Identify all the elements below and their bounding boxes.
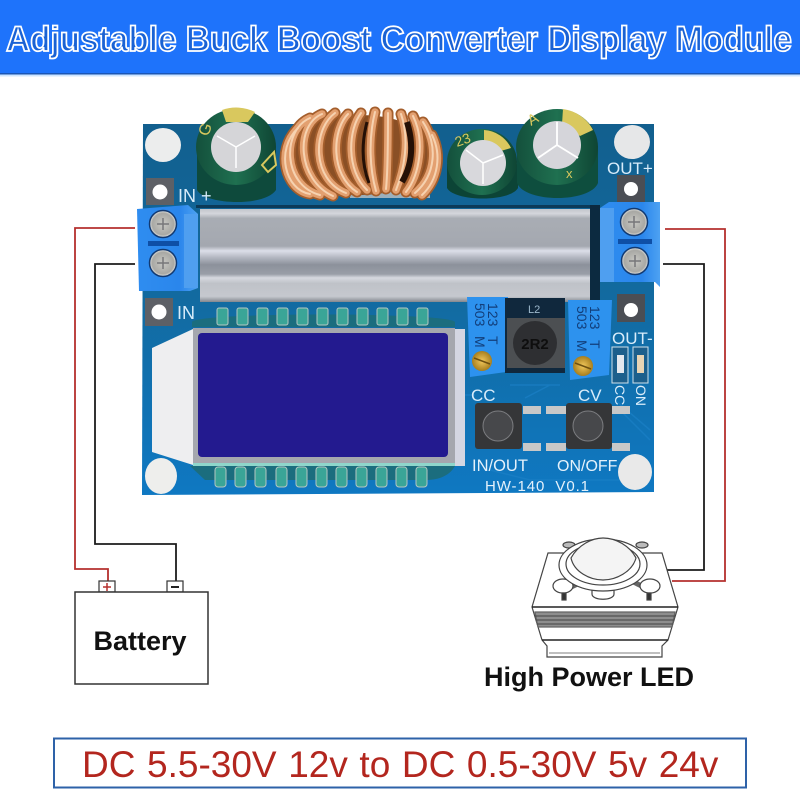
high power LED illustration [532,538,678,657]
copper coil toroid [284,112,437,198]
wiring: input black [95,264,176,581]
capacitor left: G [196,121,216,138]
trimmer left: 503 [472,303,488,327]
wiring: output black [663,264,704,570]
mounting screws [553,542,660,600]
pad OUT plus [617,175,645,202]
pad OUT minus [617,294,645,322]
label CV: CV [578,386,602,405]
capacitor middle: 23 [453,129,473,150]
aluminium heat sink [196,205,600,305]
inductor L2: 2R2 [521,336,549,353]
capacitor middle [447,129,518,198]
inductor L2: L2 [528,304,540,316]
LCD bottom pins [190,466,455,487]
board label OUT+: OUT+ [607,159,653,178]
LED label: High Power LED [484,662,694,692]
trimmer right: T [587,340,603,349]
trimmer right: 123 [587,306,603,330]
trimmer left: T [485,336,501,345]
right screw terminal [600,202,660,287]
battery label: Battery [93,626,187,656]
trimmer right: 503 [574,306,590,330]
board label IN-: IN [177,303,195,323]
label CC vertical: CC [612,385,628,405]
mounting post bottom right [618,454,652,490]
trimmer right: M [574,340,590,352]
capacitor right: A [524,110,542,129]
header banner [0,0,800,76]
button IN/OUT [475,403,541,451]
negative terminal [167,581,183,592]
specification text: DC 5.5-30V 12v to DC 0.5-30V 5v 24v [82,744,719,785]
button ON/OFF [546,403,630,451]
heat sink base [532,553,678,657]
capacitor left [196,108,276,202]
lens [559,538,647,591]
specification box [54,738,746,788]
inductor L2 [505,298,565,373]
indicator LEDs [612,347,648,383]
battery [75,581,208,684]
trimmer left: 123 [485,303,501,327]
LCD top pins [192,308,455,327]
pad IN plus [146,178,174,205]
capacitor right [516,109,598,198]
mounting post top right [614,125,650,159]
mounting post top left [145,128,181,162]
LCD display [152,328,465,466]
label model number: HW-140 V0.1 [485,478,589,495]
PCB base [142,124,654,495]
pad IN minus [145,298,173,326]
trimmer right [568,300,612,380]
battery body [75,592,208,684]
label ON vertical: ON [633,385,649,406]
trimmer left [467,297,508,377]
positive terminal [99,581,115,592]
wiring: output red [665,229,725,581]
board label IN+: IN + [178,186,212,206]
label ON/OFF: ON/OFF [557,458,618,475]
label CC: CC [471,386,496,405]
trimmer left: M [472,336,488,348]
mounting post bottom left [145,458,177,494]
label IN/OUT: IN/OUT [472,457,528,475]
circuit board [137,108,660,495]
left screw terminal [137,205,198,291]
wiring: input red [75,228,135,581]
capacitor right: x [566,166,573,181]
board label OUT-: OUT- [612,329,653,348]
